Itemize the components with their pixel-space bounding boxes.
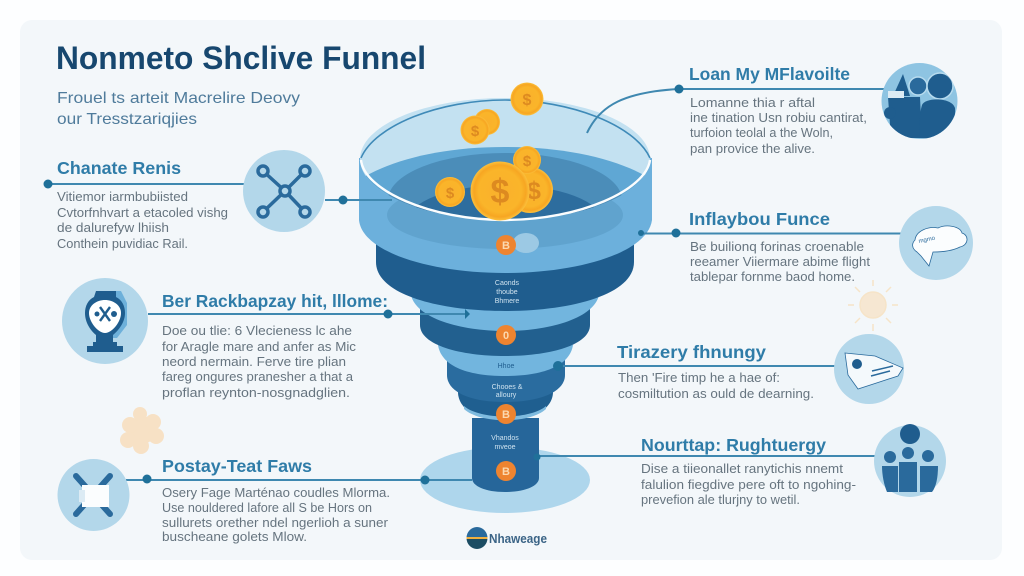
section: Chanate Renis: de dalurefyw lhiish xyxy=(57,221,169,235)
section: Chanate Renis: Chanate Renis xyxy=(57,158,181,178)
decorative faded sun, right xyxy=(848,280,898,331)
section: Ber Rackbapzay: fareg ongures pranesher a that a xyxy=(162,370,353,384)
subtitle: Frouel ts arteit Macrelire Deovy xyxy=(57,90,300,107)
section: Ber Rackbapzay: Doe ou tlie: 6 Vlecieness lc ahe xyxy=(162,324,352,338)
section: Loan My MFlavoilte: pan provice the alive. xyxy=(690,142,815,156)
section: Nourttap Rughtuergy: Nourttap: Rughtuergy xyxy=(641,435,826,455)
icon: speech cloud: mgmo xyxy=(918,235,936,245)
logo xyxy=(466,527,547,550)
icon: speech cloud xyxy=(899,206,973,280)
ground ellipse under funnel xyxy=(420,447,590,513)
coins xyxy=(435,82,553,220)
tier labels: Vhandos xyxy=(491,435,519,442)
tier 1 dark xyxy=(376,235,634,311)
tier 4 light xyxy=(438,345,573,376)
section: Tirazery fhnungy: cosmiltution as ould de dearning. xyxy=(618,387,814,401)
logo: Nhaweage xyxy=(489,532,547,546)
section: Postay-Teat Faws: Use nouldered lafore all S be Hors on xyxy=(162,501,372,515)
section: Tirazery fhnungy: Then 'Fire timp he a hae of: xyxy=(618,371,780,385)
section: Inflaybou Funce: tablepar fornme baod home. xyxy=(690,270,855,284)
section: Loan My MFlavoilte: ine tination Usn robiu cantirat, xyxy=(690,111,867,125)
section: Postay-Teat Faws xyxy=(58,456,472,544)
tier labels: Hhoe xyxy=(498,363,514,370)
section: Postay-Teat Faws: sullurets orether ndel ngerlioh a suner xyxy=(162,516,388,530)
icon: network nodes xyxy=(243,150,325,232)
section: Loan My MFlavoilte xyxy=(587,63,958,156)
section: Chanate Renis: Cvtorfnhvart a etacoled vishg xyxy=(57,206,228,220)
funnel xyxy=(355,98,656,492)
section: Inflaybou Funce: Be builionq forinas croenable xyxy=(690,240,864,254)
section: Loan My MFlavoilte: Loan My MFlavoilte xyxy=(689,64,850,84)
coins: $ xyxy=(523,153,532,170)
section: Chanate Renis: Conthein puvidiac Rail. xyxy=(57,237,188,251)
orange tokens: B xyxy=(502,409,510,421)
coins: $ xyxy=(523,92,532,109)
section: Tirazery fhnungy: Tirazery fhnungy xyxy=(617,342,766,362)
icon: cross connector xyxy=(58,459,130,531)
section: Postay-Teat Faws: Osery Fage Marténao coudles Mlorma. xyxy=(162,486,390,500)
title: Nonmeto Shclive Funnel xyxy=(56,40,426,76)
section: Nourttap Rughtuergy xyxy=(534,424,946,507)
icon: open book xyxy=(834,334,904,404)
tier labels xyxy=(491,280,523,451)
orange tokens: B xyxy=(502,466,510,478)
icon: team xyxy=(874,424,946,497)
subtitle xyxy=(57,90,300,128)
tier labels: thoube xyxy=(496,289,518,296)
section: Chanate Renis: Vitiemor iarmbubiisted xyxy=(57,190,188,204)
tier 3 xyxy=(420,305,590,356)
icon: vase xyxy=(62,278,148,364)
section: Ber Rackbapzay: Ber Rackbapzay hit, lllome: xyxy=(162,291,388,311)
glass rim xyxy=(360,98,650,220)
orange tokens: 0 xyxy=(503,330,509,342)
tier 5 xyxy=(447,360,565,402)
section: Inflaybou Funce: Inflaybou Funce xyxy=(689,209,830,229)
section: Nourttap Rughtuergy: prevefion ale tlurjny to wetil. xyxy=(641,493,800,507)
section: Ber Rackbapzay: proflan reynton-nosgnadglien. xyxy=(162,386,350,400)
tier 6 xyxy=(458,385,553,420)
section: Inflaybou Funce: reeamer Viiermare abime flight xyxy=(690,255,871,269)
tier labels: Bhmere xyxy=(495,298,519,305)
section: Ber Rackbapzay: neord nermain. Ferve tire plian xyxy=(162,355,346,369)
section: Ber Rackbapzay: for Aragle mare and anfer as Mic xyxy=(162,340,356,354)
tier labels: Chooes & xyxy=(492,384,523,391)
orange tokens: B xyxy=(502,240,510,252)
tier labels: mveoe xyxy=(494,444,516,451)
coins: $ xyxy=(471,123,480,140)
tier labels: Caonds xyxy=(495,280,520,287)
section: Loan My MFlavoilte: turfoion teolal a the Woln, xyxy=(690,126,833,140)
coins: $ xyxy=(491,173,510,211)
decorative faded splash, left xyxy=(120,407,164,454)
section: Postay-Teat Faws: buscheane golets Mlow. xyxy=(162,530,307,544)
section: Inflaybou Funce xyxy=(638,206,973,284)
coins: $ xyxy=(446,185,455,202)
icon: people group xyxy=(882,63,958,139)
section: Chanate Renis xyxy=(44,150,392,251)
subtitle: our Tresstzariqjies xyxy=(57,111,197,128)
coins: $ xyxy=(527,177,541,205)
section: Ber Rackbapzay xyxy=(62,278,470,400)
section: Tirazery fhnungy xyxy=(553,334,904,404)
orange tokens xyxy=(496,233,539,481)
section: Postay-Teat Faws: Postay-Teat Faws xyxy=(162,456,312,476)
white rim xyxy=(361,160,650,220)
section: Nourttap Rughtuergy: Dise a tiieonallet ranytichis nnemt xyxy=(641,462,844,476)
water layers xyxy=(366,147,644,219)
section: Nourttap Rughtuergy: falulion fiegdive pere oft to ngohing- xyxy=(641,478,856,492)
section: Loan My MFlavoilte: Lomanne thia r aftal xyxy=(690,96,815,110)
bowl body xyxy=(359,158,652,273)
tier 2 light xyxy=(411,295,599,331)
band under rim xyxy=(387,181,623,249)
funnel stem xyxy=(472,418,539,492)
tier labels: alloury xyxy=(496,392,517,399)
